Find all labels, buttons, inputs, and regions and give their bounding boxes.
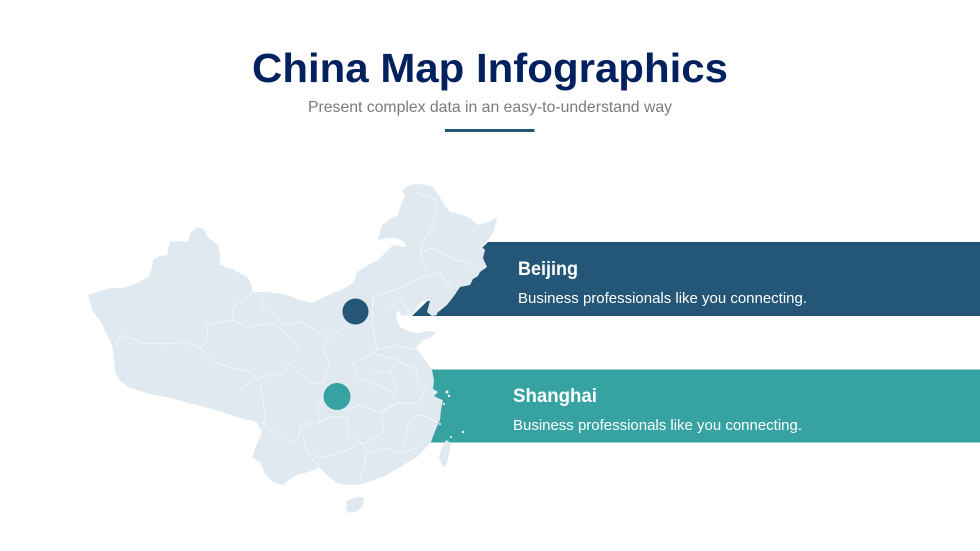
marker: Beijing [342, 298, 368, 324]
province borders [115, 192, 477, 480]
label: Shanghai [513, 386, 802, 434]
label: Beijing: Business professionals like you connecting. [518, 290, 807, 307]
subtitle: Present complex data in an easy-to-understand way [308, 99, 672, 116]
label: Shanghai: Shanghai [513, 386, 597, 407]
title underline [445, 129, 534, 132]
label: Shanghai: Business professionals like you connecting. [513, 417, 802, 434]
band: Shanghai [425, 370, 980, 442]
map of China [88, 184, 497, 513]
label: Beijing: Beijing [518, 259, 578, 280]
label: Beijing [518, 259, 807, 307]
island: Taiwan [439, 440, 451, 467]
island: Hainan [346, 497, 364, 513]
marker: Shanghai [324, 383, 350, 410]
title: China Map Infographics [252, 45, 728, 91]
coastal islets [439, 390, 464, 438]
band: Beijing [412, 242, 980, 316]
